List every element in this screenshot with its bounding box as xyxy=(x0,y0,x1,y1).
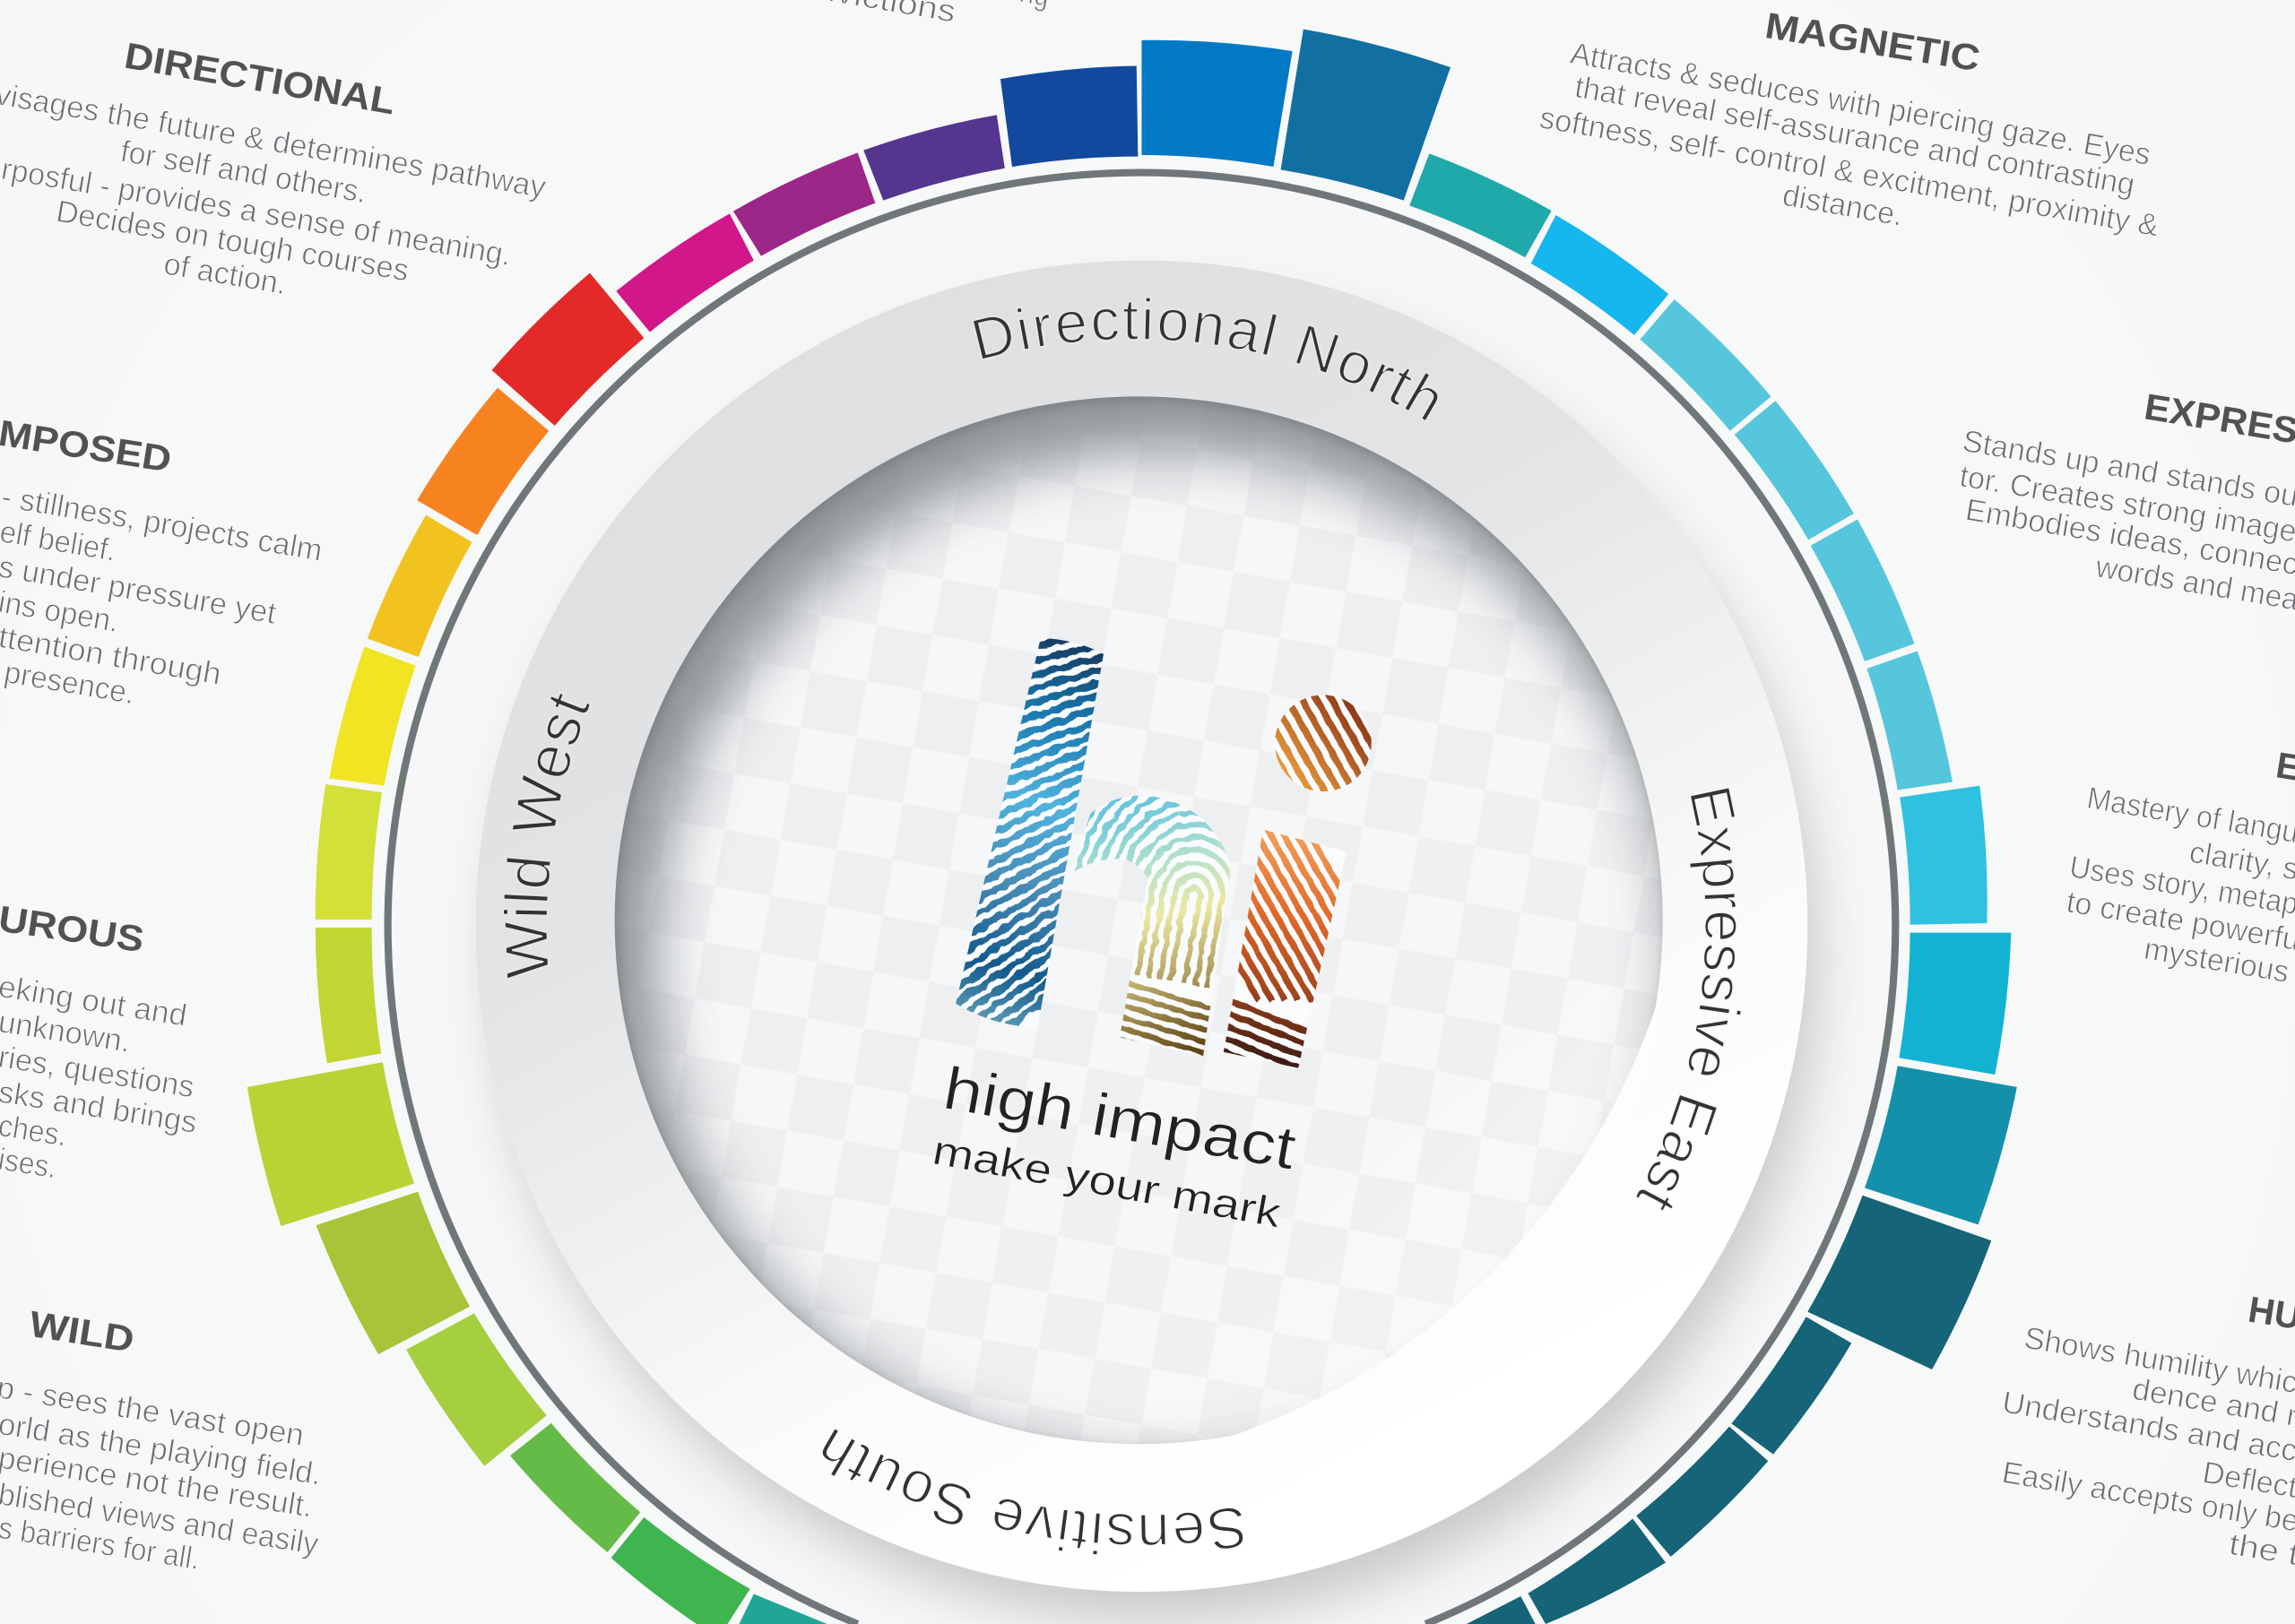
segment: green teal xyxy=(739,1594,827,1624)
trait: Wild xyxy=(0,1303,324,1576)
trait: Humble xyxy=(2000,1289,2295,1573)
logo wordmark: high impact xyxy=(939,1055,1301,1182)
segment: deep teal 3 xyxy=(1636,1427,1768,1557)
trait: Directional: visages the future & determines pathway xyxy=(0,77,550,205)
trait: Wild: WILD xyxy=(27,1303,137,1361)
logo letter h stem xyxy=(956,638,1104,1026)
trait: Wild: blished views and easily xyxy=(0,1478,322,1562)
color wheel segments xyxy=(247,30,2017,1624)
segment: purple xyxy=(733,152,875,256)
trait: Adventurous: eking out and xyxy=(0,970,189,1033)
logo: fingerprint hi xyxy=(934,638,1372,1228)
trait: Expressive: Stands up and stands ou xyxy=(1960,424,2295,514)
band label: Directional North: Directional North xyxy=(974,298,1438,420)
segment: sky blue xyxy=(1531,215,1668,335)
logo letter i stem xyxy=(1224,830,1347,1068)
trait: Magnetic xyxy=(1537,4,2161,244)
band label: Expressive East: Expressive East xyxy=(1637,789,1741,1210)
trait: Composed: - stillness, projects calm xyxy=(0,479,325,568)
segment: deep blue xyxy=(1000,65,1138,167)
trait: Expressive xyxy=(1957,385,2295,618)
trait: Composed: ttention through xyxy=(0,620,224,692)
segment: cyan xyxy=(1900,786,1988,925)
segment: light cyan 3 xyxy=(1811,520,1915,661)
trait: Eloquent: mysterious xyxy=(2142,932,2291,989)
trait: Wild: orld as the playing field. xyxy=(0,1407,324,1492)
segment: deep teal large xyxy=(1807,1196,1991,1369)
trait: Wild: p - sees the vast open xyxy=(0,1370,307,1453)
logo wordmark xyxy=(930,1055,1301,1236)
trait: Wild: s barriers for all. xyxy=(0,1511,203,1576)
trait: Eloquent xyxy=(2064,744,2295,989)
disc drop shadow xyxy=(495,298,1818,1621)
trait: Directional xyxy=(0,35,550,301)
segment: deep teal 5 xyxy=(1467,1596,1536,1624)
segment: large lime xyxy=(247,1062,414,1226)
trait: Adventurous: ries, questions xyxy=(0,1040,196,1104)
central well with checkerboard xyxy=(615,396,1663,1445)
band label: Sensitive South: Sensitive South xyxy=(823,1429,1243,1554)
trait: Magnetic: that reveal self-assurance and contrasting xyxy=(1572,70,2137,203)
trait: Humble: dence and r xyxy=(2130,1372,2295,1433)
raised band xyxy=(476,261,1807,1592)
segment: magenta xyxy=(616,213,754,333)
band label: Wild West: Wild West xyxy=(504,694,590,979)
trait: Composed: s under pressure yet xyxy=(0,550,279,631)
trait: Magnetic: MAGNETIC xyxy=(1762,4,1983,79)
segment: violet xyxy=(863,115,1005,201)
segment: strong cyan xyxy=(1899,933,2011,1075)
logo dot of i xyxy=(1275,695,1372,792)
trait: Composed: presence. xyxy=(2,655,137,711)
segment: orange xyxy=(417,388,549,535)
trait: Humble: Understands and acc xyxy=(2000,1386,2295,1468)
segment: light cyan 2 xyxy=(1735,401,1854,540)
segment: light cyan 1 xyxy=(1640,299,1771,431)
trait: Magnetic: Attracts & seduces with piercing gaze. Eyes xyxy=(1568,37,2153,172)
trait: Adventurous xyxy=(0,898,199,1185)
segment: lemon lime xyxy=(316,784,382,920)
trait: Humble: Shows humility whic xyxy=(2022,1321,2295,1400)
trait: Expressive: Embodies ideas, connec xyxy=(1963,493,2295,582)
segment: red xyxy=(492,273,644,426)
grey ring and inner plate xyxy=(388,173,1895,1624)
segment: blue xyxy=(1141,40,1293,167)
text fragment: top partial lines xyxy=(814,0,1052,30)
trait: Directional: rposful - provides a sense of meaning. xyxy=(0,152,514,272)
logo letter h arch xyxy=(1074,796,1230,1056)
trait: Directional: Decides on tough courses xyxy=(54,194,411,288)
trait: Expressive: tor. Creates strong image xyxy=(1957,459,2295,549)
trait: Adventurous: unknown. xyxy=(0,1005,133,1059)
segment: amber xyxy=(368,515,472,657)
segment: yellow green xyxy=(406,1313,547,1466)
segment: bright green xyxy=(611,1517,750,1624)
segment: yellow xyxy=(329,647,416,786)
trait: Composed: elf belief. xyxy=(0,514,118,568)
segment: lime xyxy=(316,928,381,1063)
segment: green xyxy=(510,1423,640,1552)
logo wordmark: make your mark xyxy=(930,1127,1285,1236)
bright crescent over lower right of well xyxy=(1229,980,1664,1437)
trait: Wild: perience not the result. xyxy=(0,1441,315,1525)
segment: dark cyan xyxy=(1865,1066,2017,1224)
segment: steel blue xyxy=(1281,30,1451,201)
trait: Magnetic: distance. xyxy=(1780,178,1906,233)
trait: Composed xyxy=(0,412,325,711)
segment: light cyan 4 xyxy=(1866,651,1953,790)
segment: teal xyxy=(1409,153,1552,257)
trait: Directional: of action. xyxy=(161,247,289,301)
trait: Composed: MPOSED xyxy=(0,412,174,480)
segment: olive green xyxy=(316,1192,470,1354)
trait: Directional: DIRECTIONAL xyxy=(122,35,398,122)
trait: Adventurous: sks and brings xyxy=(0,1075,199,1140)
trait: Magnetic: softness, self- control & excitment, proximity & xyxy=(1537,100,2161,244)
trait: Humble: the t xyxy=(2227,1527,2295,1573)
segment: deep teal 4 xyxy=(1528,1518,1666,1624)
trait: Expressive: EXPRES xyxy=(2142,385,2295,452)
trait: Directional: for self and others. xyxy=(118,134,369,210)
segment: deep teal 2 xyxy=(1731,1317,1851,1455)
